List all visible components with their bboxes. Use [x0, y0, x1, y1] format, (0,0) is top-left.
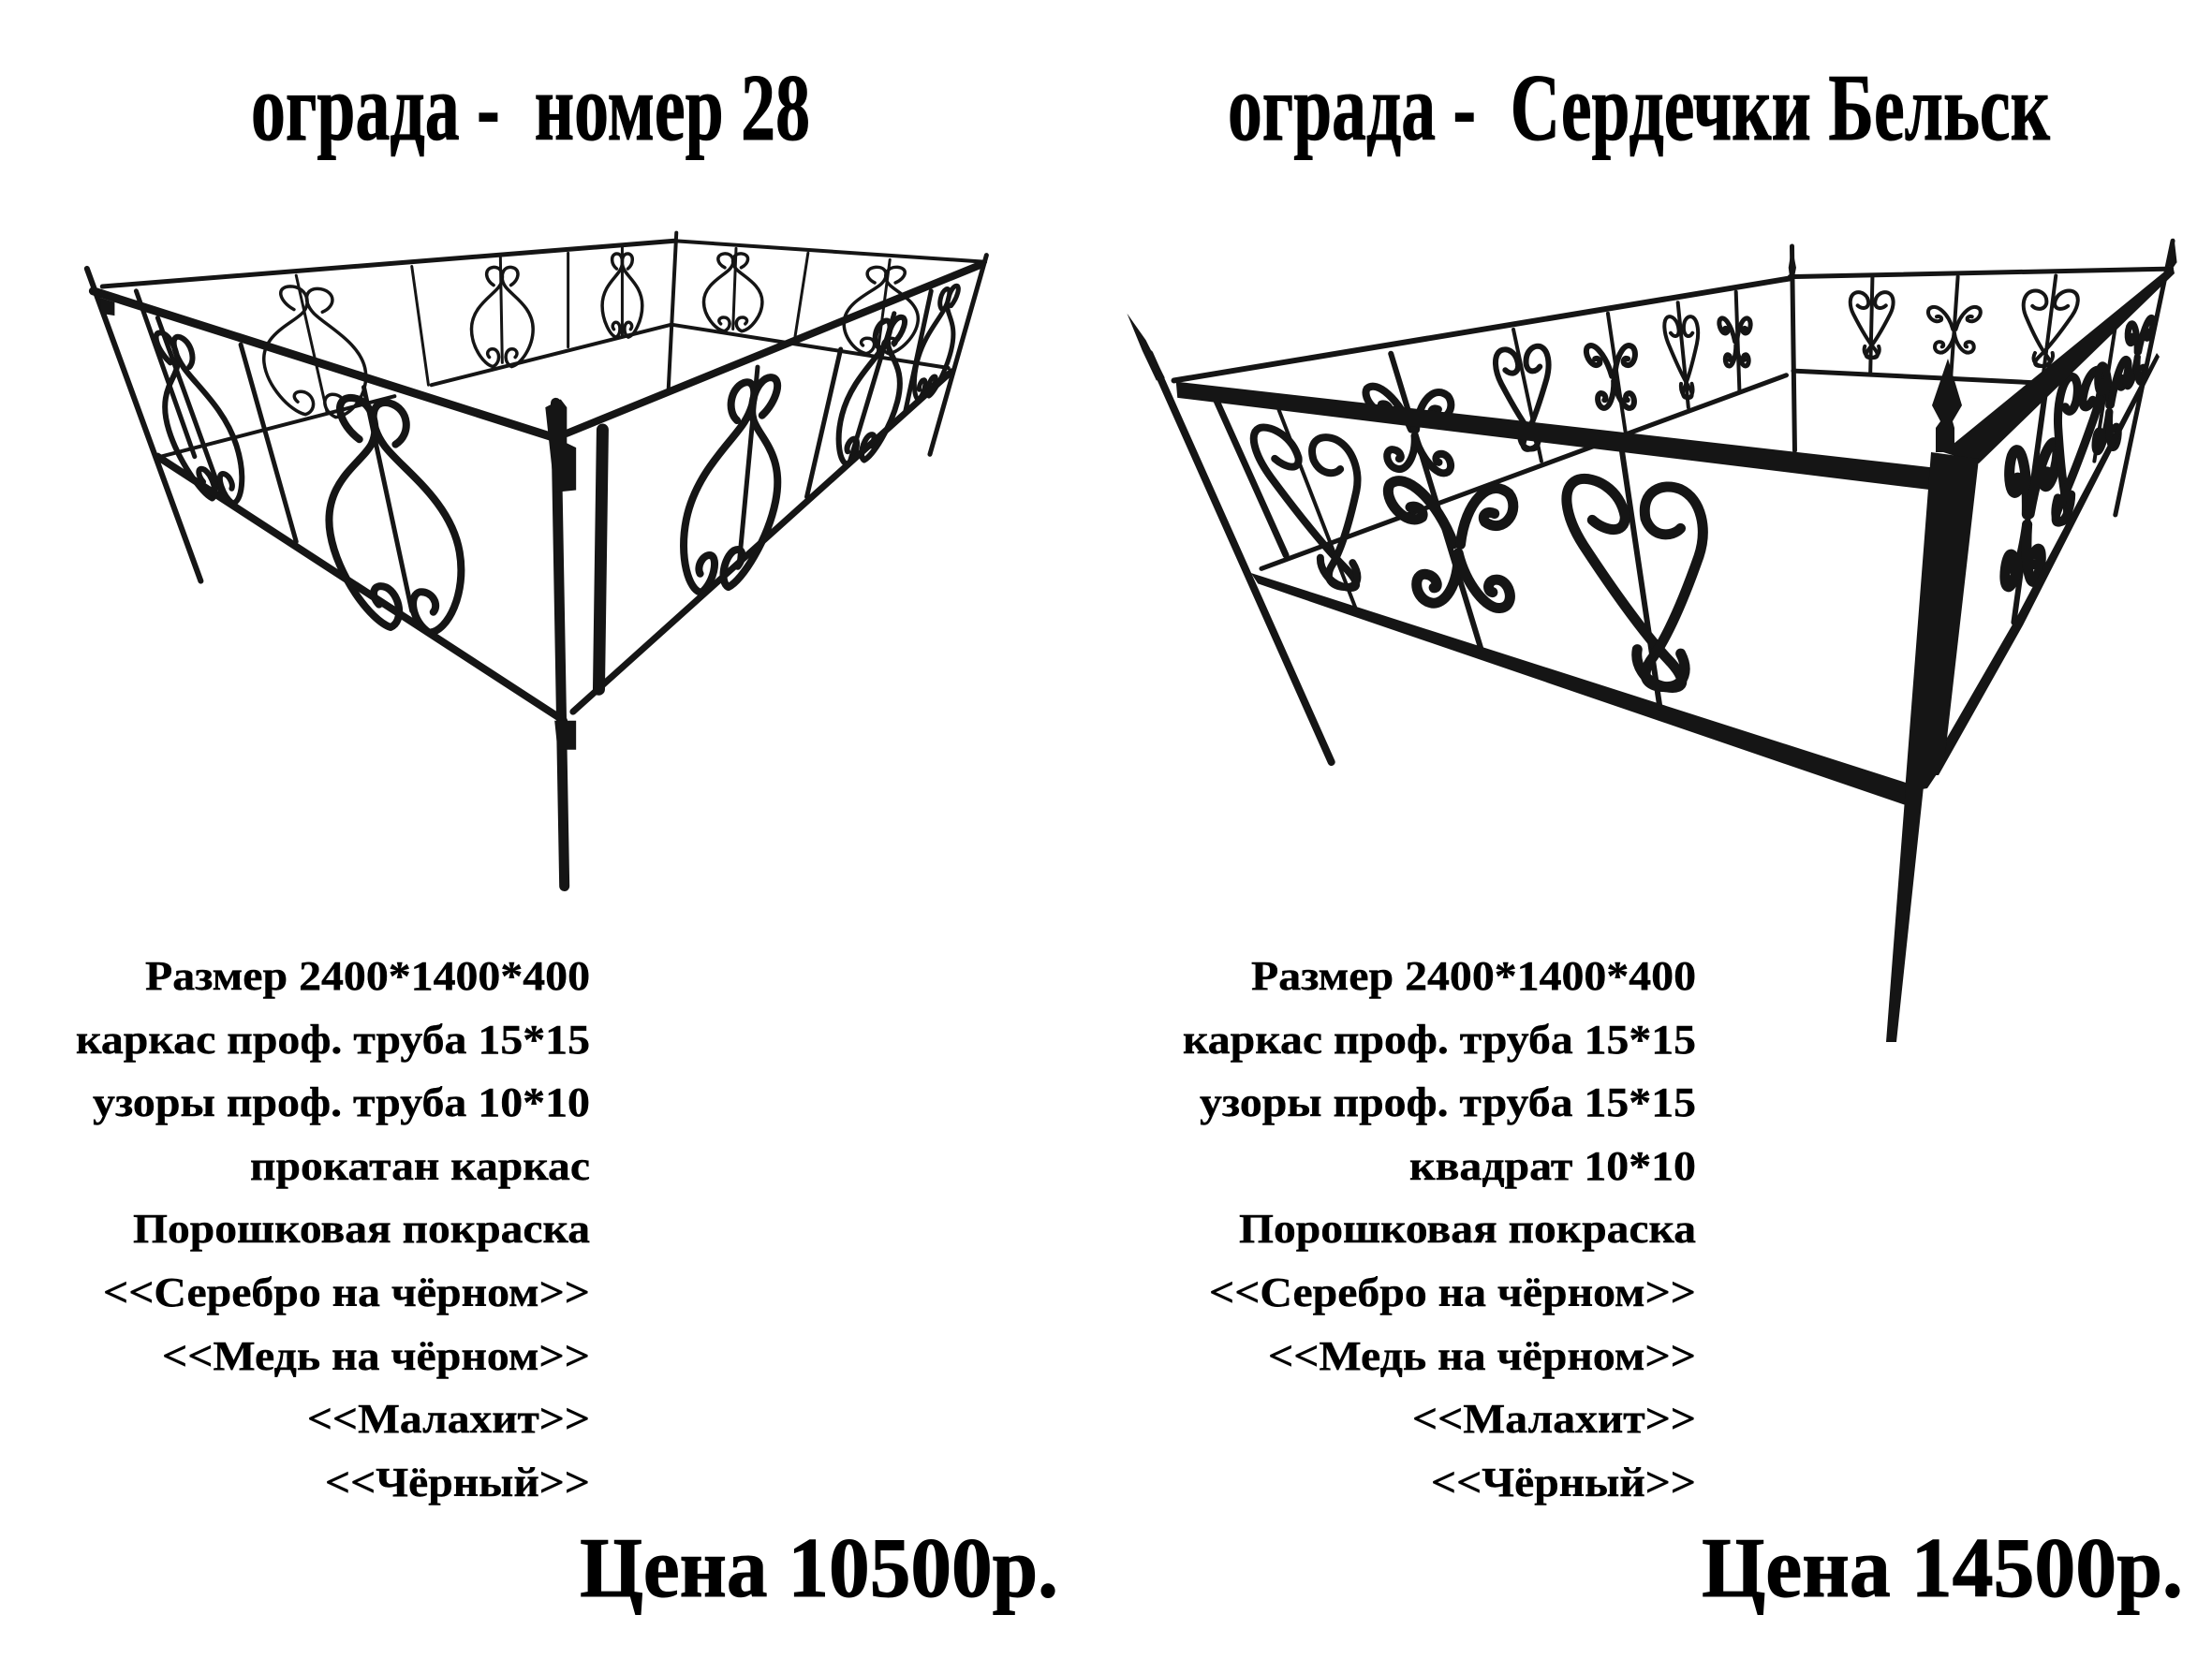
spec list: fence 28: <<Серебро на чёрном>>	[103, 1270, 590, 1315]
spec list: fence Serdechki Belsk	[1183, 953, 1696, 1505]
spec list: fence 28: Порошковая покраска	[133, 1206, 590, 1252]
spec list: fence 28: Размер 2400*1400*400	[145, 953, 590, 999]
spec list: fence 28: <<Чёрный>>	[325, 1460, 590, 1505]
spec list: fence Serdechki Belsk: каркас проф. труба 15*15	[1183, 1017, 1696, 1063]
spec list: fence Serdechki Belsk: узоры проф. труба 15*15	[1200, 1079, 1696, 1125]
spec list: fence 28: узоры проф. труба 10*10	[93, 1079, 590, 1125]
back ornaments	[255, 254, 923, 420]
price: fence Serdechki Belsk: Цена 14500р.	[1702, 1520, 2183, 1615]
corner post, side rails and spear finial of second fence	[1886, 265, 2175, 1042]
illustration: fence number 28	[87, 233, 986, 887]
frame posts	[87, 269, 200, 581]
back rails and pickets	[1174, 246, 2172, 568]
frame rails	[1176, 382, 1933, 491]
front ornaments	[1248, 317, 2154, 694]
price: fence 28: Цена 10500р.	[580, 1520, 1058, 1615]
front ornaments	[137, 282, 968, 639]
back ornaments	[1364, 291, 2079, 475]
spec list: fence 28: <<Медь на чёрном>>	[162, 1333, 590, 1379]
frame posts	[1149, 354, 1332, 762]
spec list: fence Serdechki Belsk: <<Серебро на чёрном>>	[1209, 1270, 1696, 1315]
finials	[1127, 314, 1165, 380]
spec list: fence Serdechki Belsk: квадрат 10*10	[1409, 1143, 1696, 1189]
spec list: fence 28: прокатан каркас	[250, 1143, 590, 1189]
front pickets	[1216, 327, 2116, 711]
title: fence 28: ограда - номер 28	[251, 55, 810, 161]
spec list: fence 28: <<Малахит>>	[307, 1396, 590, 1442]
spec list: fence Serdechki Belsk: <<Малахит>>	[1412, 1396, 1696, 1442]
spec list: fence Serdechki Belsk: <<Чёрный>>	[1431, 1460, 1696, 1505]
spec list: fence 28	[76, 953, 590, 1505]
spec list: fence Serdechki Belsk: Размер 2400*1400*400	[1251, 953, 1696, 999]
illustration: fence Serdechki Belsk	[1127, 238, 2177, 805]
spec list: fence Serdechki Belsk: Порошковая покраска	[1239, 1206, 1696, 1252]
spec list: fence Serdechki Belsk: <<Медь на чёрном>>	[1268, 1333, 1696, 1379]
front pickets	[136, 291, 931, 611]
spec list: fence 28: каркас проф. труба 15*15	[76, 1017, 590, 1063]
frame rails	[93, 291, 557, 439]
back rails and pickets	[102, 233, 985, 457]
